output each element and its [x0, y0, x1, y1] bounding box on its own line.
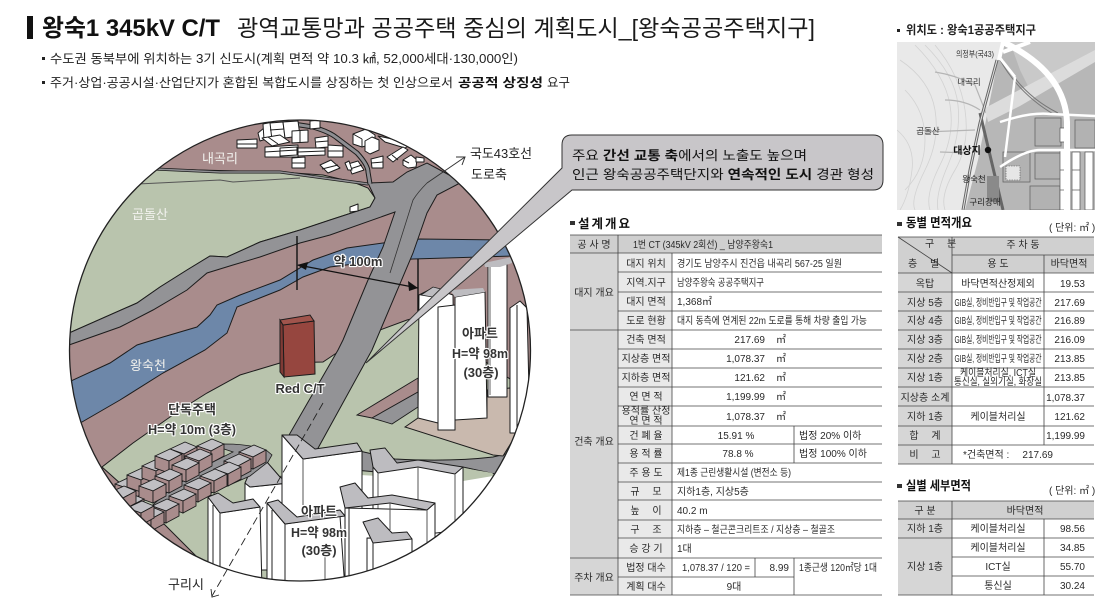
village buildings [237, 120, 424, 212]
panel: floor area table: 216.09 [1054, 335, 1085, 346]
column labels: 건축 개요 [574, 436, 614, 448]
panel: design overview table [570, 217, 882, 595]
dimension: about 100m [297, 236, 418, 317]
panel: floor area table: 지상 4층 [907, 315, 943, 327]
values: 1,078.37 [726, 412, 765, 423]
panel: floor area table: 지상 5층 [907, 297, 943, 309]
panel: room detail table: 구 분 [914, 505, 936, 517]
panel: room detail table: 지상 1층 [907, 561, 943, 573]
panel: floor area table [897, 216, 1095, 464]
column labels: 연 면 적 [629, 415, 663, 427]
panel: design overview table: 설 계 개 요 [578, 217, 630, 231]
values: 1,078.37 / 120 = [682, 563, 750, 574]
values: 1,078.37 [726, 354, 765, 365]
aerial circular site illustration [60, 110, 540, 597]
panel: floor area table: 지상 3층 [907, 334, 943, 346]
panel: location map: 대상지 [953, 144, 981, 157]
values [633, 239, 877, 593]
lower green ground [102, 318, 510, 578]
values: ㎡ [776, 411, 786, 423]
values: 1대 [677, 543, 692, 555]
column labels: 대지 위치 [626, 257, 666, 270]
values: ㎡ [776, 391, 786, 403]
panel: room detail table [897, 479, 1095, 595]
column labels: 승 강 기 [629, 543, 663, 555]
lower apartments [208, 435, 463, 590]
detached houses [109, 439, 266, 531]
panel: floor area table: 통신실, 실외기실, 화장실 [954, 376, 1042, 388]
lower right road [362, 451, 506, 474]
column labels: 높 이 [630, 505, 662, 517]
values: 121.62 [734, 373, 765, 384]
map labels: Red C/T [275, 381, 325, 396]
panel: room detail table: 케이블처리실 [970, 523, 1026, 535]
column labels: 대지 개요 [574, 287, 614, 299]
values: 40.2 m [677, 506, 708, 517]
panel: room detail table: 바닥면적 [1007, 505, 1043, 517]
column labels: 공 사 명 [577, 239, 611, 251]
arrow: toward Guri [211, 403, 323, 597]
values: 제1종 근린생활시설 (변전소 등) [677, 466, 791, 479]
column labels: 지하층 면적 [622, 371, 670, 384]
title: 광역교통망과 공공주택 중심의 계획도시_[왕숙공공주택지구] [237, 15, 815, 41]
map labels: (30층) [463, 365, 499, 380]
values: 남양주왕숙 공공주택지구 [677, 277, 764, 289]
upper thin road [155, 169, 368, 184]
map labels: 약 100m [334, 254, 382, 269]
panel: floor area table: 217.69 [1054, 298, 1085, 309]
upper green hill [60, 169, 375, 335]
panel: floor area table: 주 차 동 [1006, 239, 1040, 251]
text block: project summary: 요구 [547, 76, 570, 90]
panel: room detail table: ICT실 [985, 561, 1011, 573]
panel: location map: 왕숙천 [962, 174, 986, 184]
panel: location map: 위치도 : 왕숙1공공주택지구 [906, 23, 1036, 37]
panel: floor area table: GIB실, 정비반입구 및 작업공간 [954, 314, 1042, 327]
panel: floor area table: ( 단위: ㎡ ) [1049, 221, 1095, 234]
panel: floor area table: 216.89 [1054, 316, 1085, 327]
column labels [574, 239, 670, 593]
panel: floor area table: 지하 1층 [907, 410, 943, 423]
gravel and road wedge [357, 378, 418, 418]
panel: floor area table: 213.85 [1054, 373, 1085, 384]
callout [366, 135, 883, 363]
values: 8.99 [770, 563, 789, 574]
panel: location map: 내곡리 [957, 77, 981, 87]
callout: 주요 간선 교통 축 에서의 노출도 높으며 [572, 148, 807, 163]
panel: floor area table: 121.62 [1054, 412, 1085, 423]
text block: project summary [42, 51, 570, 90]
values: 대지 동측에 연계된 22m 도로를 통해 차량 출입 가능 [677, 314, 867, 327]
village road [280, 122, 370, 184]
column labels: 주차 개요 [574, 572, 614, 584]
panel: room detail table: 통신실 [984, 580, 1012, 592]
column labels: 대지 면적 [626, 296, 666, 308]
panel: floor area table: 동별 면적개요 [906, 216, 972, 230]
panel: floor area table: 비 고 [909, 449, 941, 461]
text block: project summary: 수도권 동북부에 위치하는 3기 신도시(계획 면적 약 10.3 ㎢, 52,000세대·130,000인) [50, 51, 518, 66]
column labels: 계획 대수 [626, 581, 666, 593]
panel: room detail table: 98.56 [1060, 524, 1085, 535]
panel: location map: 곱돌산 [916, 126, 940, 136]
values: 9대 [727, 581, 741, 593]
panel: floor area table: 1,199.99 [1046, 431, 1085, 442]
panel: floor area table: 지상층 소계 [901, 392, 949, 404]
values: 78.8 % [722, 449, 754, 460]
panel: floor area table: 케이블처리실 [970, 411, 1026, 423]
map base blocks [965, 42, 1095, 210]
panel: floor area table: 층 별 [908, 258, 939, 270]
panel: floor area table: GIB실, 정비반입구 및 작업공간 [954, 296, 1042, 309]
panel: room detail table: 케이블처리실 [970, 542, 1026, 554]
panel: location map [897, 23, 1095, 210]
values: 경기도 남양주시 진건읍 내곡리 567-25 일원 [677, 257, 842, 270]
panel: floor area table: 1,078.37 [1046, 393, 1085, 404]
values: 지하층 – 철근콘크리트조 / 지상층 – 철골조 [677, 523, 835, 536]
values: 법정 100% 이하 [799, 447, 867, 460]
panel: floor area table: 217.69 [1022, 450, 1053, 461]
beige plaza [405, 388, 516, 456]
column labels: 구 조 [630, 525, 662, 536]
Red C/T building [280, 315, 315, 377]
callout: 인근 왕숙공공주택단지와 연속적인 도시 경관 형성 [572, 167, 874, 182]
panel: location map: 의정부(국43) [956, 49, 994, 59]
map labels: 아파트 [462, 326, 498, 341]
column labels: 용적률 산정 [622, 405, 670, 417]
panel: floor area table: *건축면적 : [963, 449, 1009, 461]
panel: floor area table: 지상 2층 [907, 353, 943, 365]
panel: floor area table: 합 계 [909, 430, 941, 442]
panel: floor area table: 바닥면적 [1051, 258, 1087, 270]
map labels [130, 146, 532, 592]
map labels: 단독주택 [168, 402, 216, 417]
panel: floor area table: 옥탑 [916, 278, 934, 290]
map labels: H=약 98m [291, 525, 347, 540]
values: ㎡ [776, 353, 786, 365]
arrow: road pointer [427, 157, 465, 183]
values: 1종근생 120㎡당 1대 [799, 562, 877, 574]
panel: room detail table: 실별 세부면적 [906, 479, 971, 493]
column labels: 지역.지구 [626, 277, 666, 289]
panel: room detail table: 34.85 [1060, 543, 1085, 554]
values: 217.69 [734, 335, 765, 346]
map labels: 내곡리 [202, 151, 238, 166]
map labels: 곱돌산 [132, 207, 168, 222]
panel: floor area table: GIB실, 정비반입구 및 작업공간 [954, 352, 1042, 365]
column labels: 도로 현황 [626, 315, 666, 327]
map labels: 구리시 [168, 577, 204, 592]
values: 1번 CT (345kV 2회선) _ 남양주왕숙1 [633, 239, 773, 251]
panel: floor area table: 용 도 [987, 258, 1009, 270]
title: 왕숙1 345kV C/T [42, 15, 220, 42]
panel: room detail table: 30.24 [1060, 581, 1085, 592]
column labels: 규 모 [630, 487, 662, 498]
values: ㎡ [776, 334, 786, 346]
panel: floor area table: 19.53 [1060, 279, 1085, 290]
column labels: 주 용 도 [629, 467, 663, 479]
panel: location map: 구리강매 [969, 197, 1001, 207]
values: ㎡ [776, 372, 786, 384]
values: 15.91 % [718, 431, 754, 442]
map labels: H=약 98m [452, 346, 508, 361]
river [60, 239, 512, 436]
detached houses road [152, 444, 272, 505]
panel: floor area table: 케이블처리실, ICT실 [960, 367, 1036, 379]
panel: floor area table: 지상 1층 [907, 372, 943, 384]
text block: project summary: 주거·상업·공공시설·산업단지가 혼합된 복합도시를 상징하는 첫 인상으로서 [50, 76, 453, 90]
values: 법정 20% 이하 [799, 429, 861, 442]
panel: floor area table: 바닥면적산정제외 [961, 278, 1035, 290]
map labels: H=약 10m (3층) [148, 422, 236, 437]
panel: room detail table: ( 단위: ㎡ ) [1049, 484, 1095, 497]
column labels: 용 적 률 [629, 448, 663, 460]
panel: floor area table: 213.85 [1054, 354, 1085, 365]
map labels: (30층) [301, 543, 337, 558]
column labels: 건축 면적 [626, 334, 666, 346]
column labels: 건 폐 율 [629, 430, 663, 442]
text block: project summary: 공공적 상징성 [458, 76, 543, 90]
back apartments [418, 257, 530, 433]
gray highway [60, 163, 462, 450]
map labels: 아파트 [301, 504, 337, 519]
panel: floor area table: GIB실, 정비반입구 및 작업공간 [954, 333, 1042, 346]
values: 지하1층, 지상5층 [677, 485, 749, 498]
values: 1,368㎡ [677, 296, 712, 308]
map labels: 왕숙천 [130, 358, 166, 373]
panel: room detail table: 지하 1층 [907, 522, 943, 535]
column labels: 연 면 적 [629, 391, 663, 403]
panel: floor area table: 구 분 [925, 238, 956, 250]
panel: room detail table: 55.70 [1060, 562, 1085, 573]
column labels: 법정 대수 [626, 562, 666, 574]
column labels: 지상층 면적 [622, 353, 670, 365]
map labels: 국도43호선 [470, 146, 532, 161]
map labels: 도로축 [471, 167, 507, 182]
values: 1,199.99 [726, 392, 765, 403]
